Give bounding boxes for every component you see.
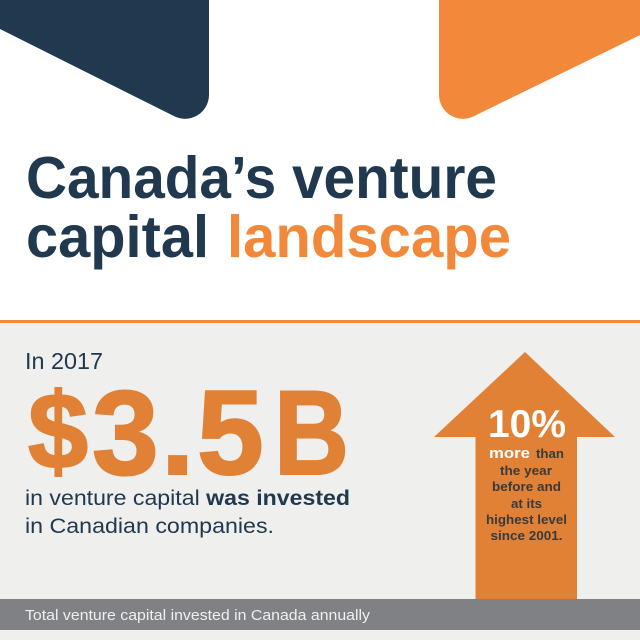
digit 5: 5 xyxy=(197,366,264,500)
icon: orange banner shape xyxy=(439,0,640,119)
title xyxy=(26,145,511,270)
icon: up arrow xyxy=(434,352,615,599)
dollar sign: $ xyxy=(28,370,88,491)
digit 3: 3 xyxy=(92,366,159,500)
orange divider xyxy=(0,320,640,323)
panel background xyxy=(0,322,640,640)
callout line 4: at its xyxy=(511,496,542,511)
description line 2: in Canadian companies. xyxy=(25,515,274,538)
callout line 2: the year xyxy=(500,463,552,478)
arrow callout xyxy=(434,352,615,599)
callout text xyxy=(486,446,567,543)
word: capital: capital xyxy=(26,204,209,270)
description line 1: in venture capital was invested xyxy=(25,487,350,510)
callout line 3: before and xyxy=(492,479,561,494)
decimal point: . xyxy=(161,366,194,500)
footer bar xyxy=(0,599,640,630)
callout line 5: highest level xyxy=(486,512,567,527)
callout line 1 xyxy=(489,446,564,462)
footer text: Total venture capital invested in Canada annually xyxy=(25,607,371,624)
word: than: than xyxy=(536,446,564,461)
title line 1: Canada’s venture xyxy=(26,145,497,211)
callout number: 10% xyxy=(488,403,566,446)
big number xyxy=(28,366,349,500)
word: landscape: landscape xyxy=(227,204,511,270)
title line 2 xyxy=(26,204,511,270)
callout line 6: since 2001. xyxy=(490,528,562,543)
icon: navy banner shape xyxy=(0,0,209,119)
text: description xyxy=(25,487,350,538)
letter B: B xyxy=(274,366,349,500)
text: year intro: In 2017 xyxy=(25,348,103,374)
panel: statistics xyxy=(0,320,640,640)
footer bar background xyxy=(0,599,640,630)
word: more: more xyxy=(489,446,530,462)
